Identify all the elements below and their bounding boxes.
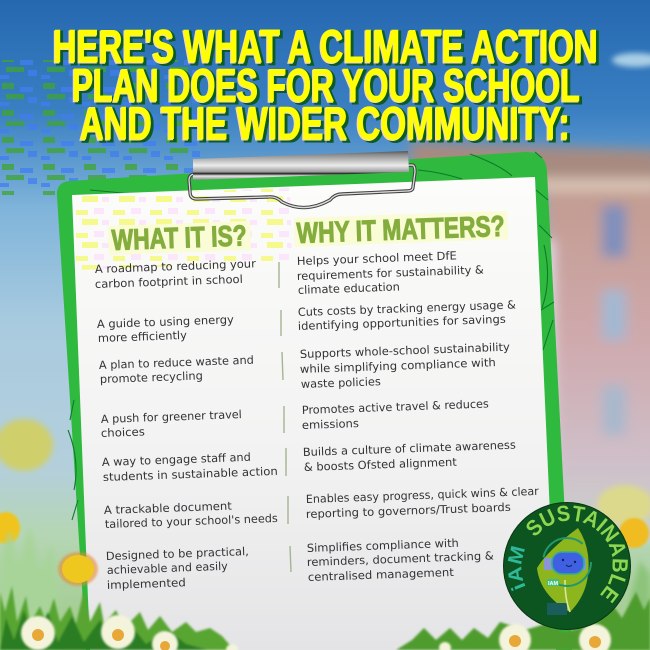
icon: mascot — [543, 538, 591, 586]
clipboard board — [57, 152, 572, 650]
text: why it matters list: waste policies — [301, 375, 381, 391]
column dividers — [279, 262, 291, 572]
badge: iAM Sustainable: IAM — [548, 581, 558, 587]
text: what it is list: A guide to using energy — [97, 313, 234, 331]
text: why it matters list: Promotes active travel & reduces — [302, 397, 489, 417]
badge text: SUSTAINABLE — [526, 506, 628, 604]
text: why it matters list: climate education — [298, 280, 400, 297]
text: what it is list: implemented — [107, 576, 186, 592]
text: what it is list: achievable and easily — [107, 560, 228, 577]
badge: iAM Sustainable — [503, 502, 631, 630]
paper sheet — [72, 177, 556, 650]
text: what it is list: Designed to be practical, — [106, 545, 249, 563]
text: what it is list: A push for greener travel — [101, 408, 242, 426]
text: why it matters list: Cuts costs by tracking energy usage & — [298, 298, 516, 319]
text: what it is list — [95, 257, 278, 592]
text: what it is list: A roadmap to reducing your — [95, 257, 256, 276]
badge: iAM Sustainable: iAM — [508, 546, 526, 592]
text: why it matters list: Supports whole-school sustainability — [300, 341, 510, 361]
text: why it matters list: identifying opportunities for savings — [298, 313, 506, 333]
text: why it matters list — [297, 249, 539, 584]
text: what it is list: tailored to your school's needs — [105, 512, 278, 531]
text: why it matters list: centralised management — [308, 566, 455, 584]
blurred yellow flowers — [0, 419, 650, 548]
text: why it matters list: Simplifies compliance with — [307, 537, 459, 555]
heading: why it matters: WHY IT MATTERS? — [296, 211, 505, 250]
title — [52, 20, 600, 151]
text: why it matters list: emissions — [302, 417, 359, 432]
yellow flower on stem — [58, 552, 98, 586]
glitch blocks behind title — [0, 60, 200, 195]
text: why it matters list: Builds a culture of climate awareness — [303, 439, 516, 459]
text: why it matters list: Helps your school meet DfE — [297, 249, 457, 268]
text: what it is list: promote recycling — [100, 369, 203, 386]
text: what it is list: more efficiently — [98, 329, 187, 345]
text: what it is list: A plan to reduce waste and — [99, 354, 254, 372]
text: why it matters list: & boosts Ofsted alignment — [304, 456, 458, 474]
text: what it is list: choices — [101, 425, 145, 440]
text: why it matters list: while simplifying compliance with — [300, 356, 496, 376]
text: what it is list: A trackable document — [104, 500, 233, 517]
text: what it is list: students in sustainable action — [103, 465, 278, 484]
clipboard clip — [189, 151, 415, 208]
icon: leaf — [537, 528, 589, 612]
text: why it matters list: Enables easy progress, quick wins & clear — [306, 485, 539, 506]
text: why it matters list: requirements for sustainability & — [297, 263, 484, 283]
heading: what it is: WHAT IT IS? — [111, 220, 247, 257]
glitch blocks on paper — [73, 188, 292, 270]
text: why it matters list: reminders, document tracking & — [307, 549, 494, 569]
text: what it is list: A way to engage staff and — [102, 451, 251, 469]
text: why it matters list: reporting to governors/Trust boards — [306, 501, 511, 521]
text: what it is list: carbon footprint in school — [95, 273, 243, 291]
daisies — [21, 615, 611, 650]
grass and daisies foreground — [0, 525, 650, 650]
